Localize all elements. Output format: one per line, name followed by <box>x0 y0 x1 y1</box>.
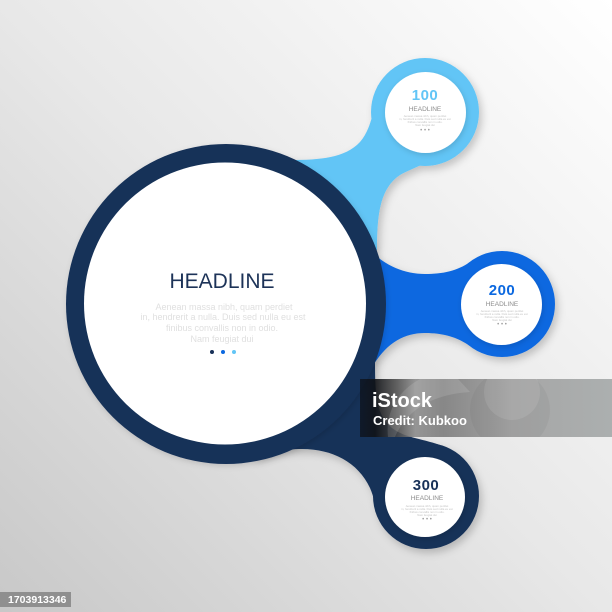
badge: 100: HEADLINE <box>409 106 442 113</box>
badge: 200: in, hendrerit a nulla. Duis sed nulla eu est <box>476 312 528 316</box>
image id tag <box>0 592 71 607</box>
image id tag: 1703913346 <box>8 594 67 606</box>
badge: 300: • • • <box>422 517 432 523</box>
badge: 100: 100 <box>412 87 438 104</box>
badge: 200 <box>461 264 542 345</box>
arm: 300 navy <box>250 340 479 549</box>
badge: 100: finibus convallis non in odio. <box>408 120 443 124</box>
badge: 200: finibus convallis non in odio. <box>485 315 520 319</box>
badge: 200: • • • <box>497 322 507 328</box>
main dots <box>210 350 236 354</box>
badge: 300: Nam feugiat dui <box>417 513 437 517</box>
badge: 200: Aenean massa nibh, quam perdiet <box>481 309 524 313</box>
badge: 200: HEADLINE <box>486 301 519 308</box>
badge: 200: 200 <box>489 282 515 299</box>
main body text: finibus convallis non in odio. <box>166 323 278 333</box>
arm: 200 blue <box>370 250 555 364</box>
main circle <box>66 144 386 464</box>
badge: 300: 300 <box>413 477 439 494</box>
badge: 100: in, hendrerit a nulla. Duis sed nulla eu est <box>399 117 451 121</box>
badge: 300: Aenean massa nibh, quam perdiet <box>406 504 449 508</box>
badge: 100: Nam feugiat dui <box>415 123 435 127</box>
watermark brand: iStock <box>372 390 433 412</box>
watermark band <box>360 379 612 437</box>
main body text <box>140 302 306 344</box>
badge: 100 <box>385 72 466 153</box>
badge: 300: HEADLINE <box>411 495 444 502</box>
watermark credit: Credit: Kubkoo <box>373 413 467 428</box>
main body text: in, hendrerit a nulla. Duis sed nulla eu est <box>140 312 306 322</box>
badge: 300: finibus convallis non in odio. <box>410 510 445 514</box>
badge: 100: • • • <box>420 128 430 134</box>
main body text: Aenean massa nibh, quam perdiet <box>155 302 293 312</box>
badge: 200: Nam feugiat dui <box>492 318 512 322</box>
badge: 300: in, hendrerit a nulla. Duis sed nulla eu est <box>401 507 453 511</box>
badge: 100: Aenean massa nibh, quam perdiet <box>404 114 447 118</box>
main body text: Nam feugiat dui <box>190 334 254 344</box>
arm: 100 light blue <box>290 58 479 250</box>
badge: 300 <box>385 457 465 537</box>
main heading: HEADLINE <box>169 270 275 293</box>
